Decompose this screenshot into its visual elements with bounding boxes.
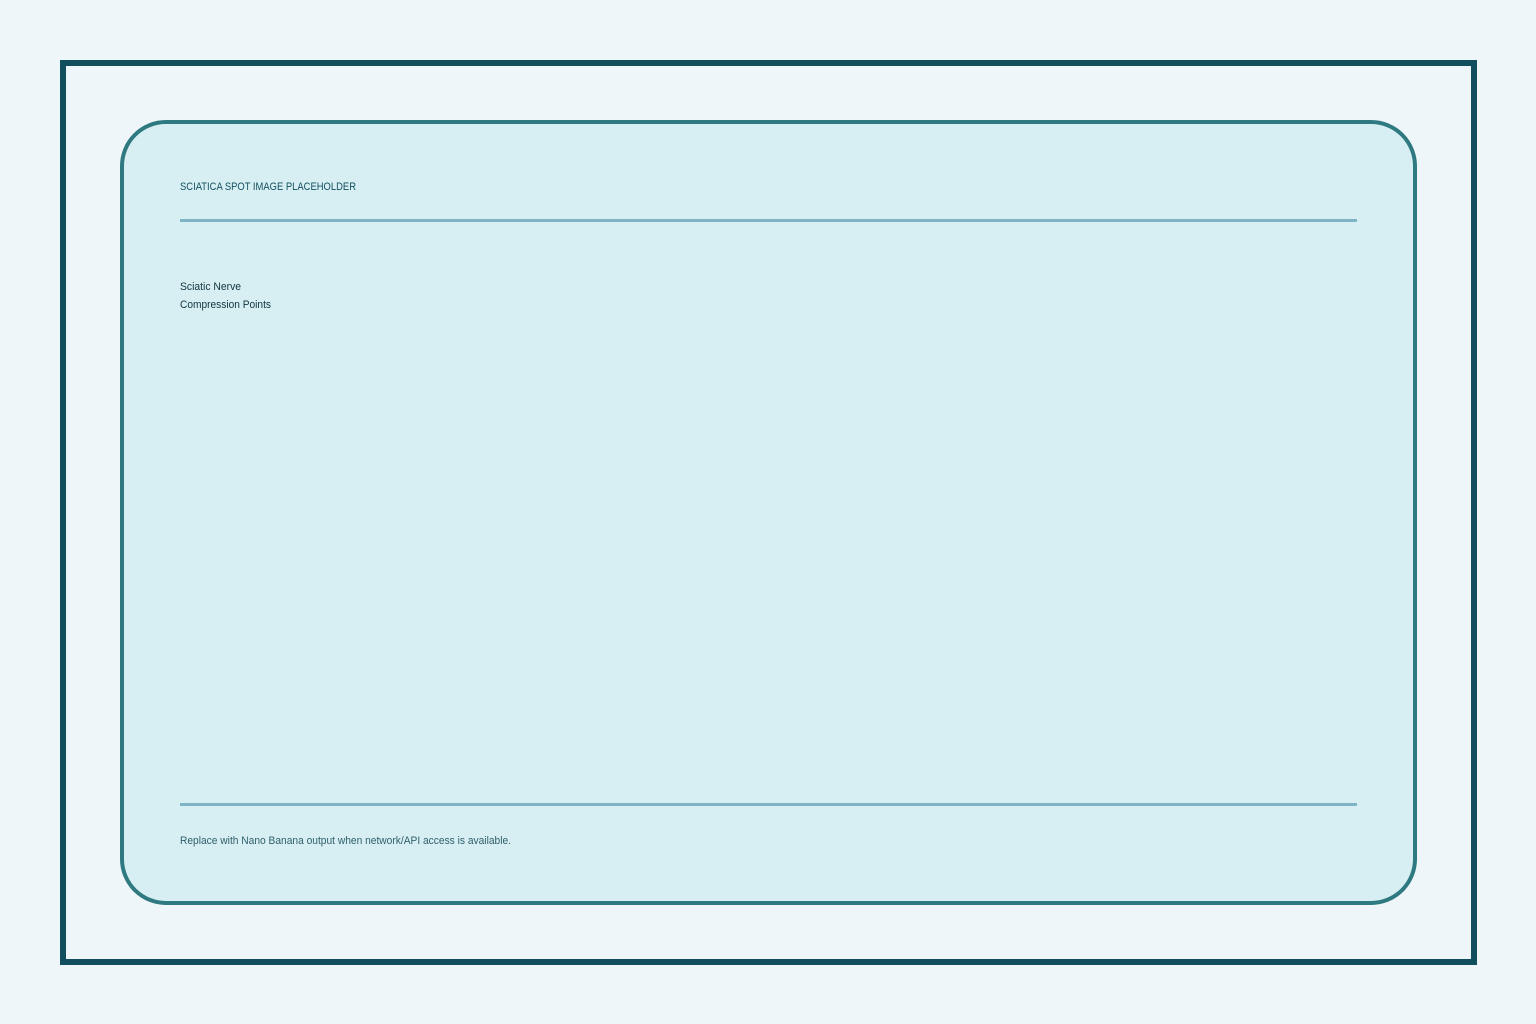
text block: image subject: Sciatic Nerve [180, 281, 241, 293]
footer note: Replace with Nano Banana output when network/API access is available. [180, 835, 511, 847]
panel: placeholder card [122, 122, 1415, 903]
text block: image subject: Compression Points [180, 299, 271, 311]
text block: image subject [180, 281, 271, 311]
heading: placeholder title: SCIATICA SPOT IMAGE PLACEHOLDER [180, 181, 356, 193]
